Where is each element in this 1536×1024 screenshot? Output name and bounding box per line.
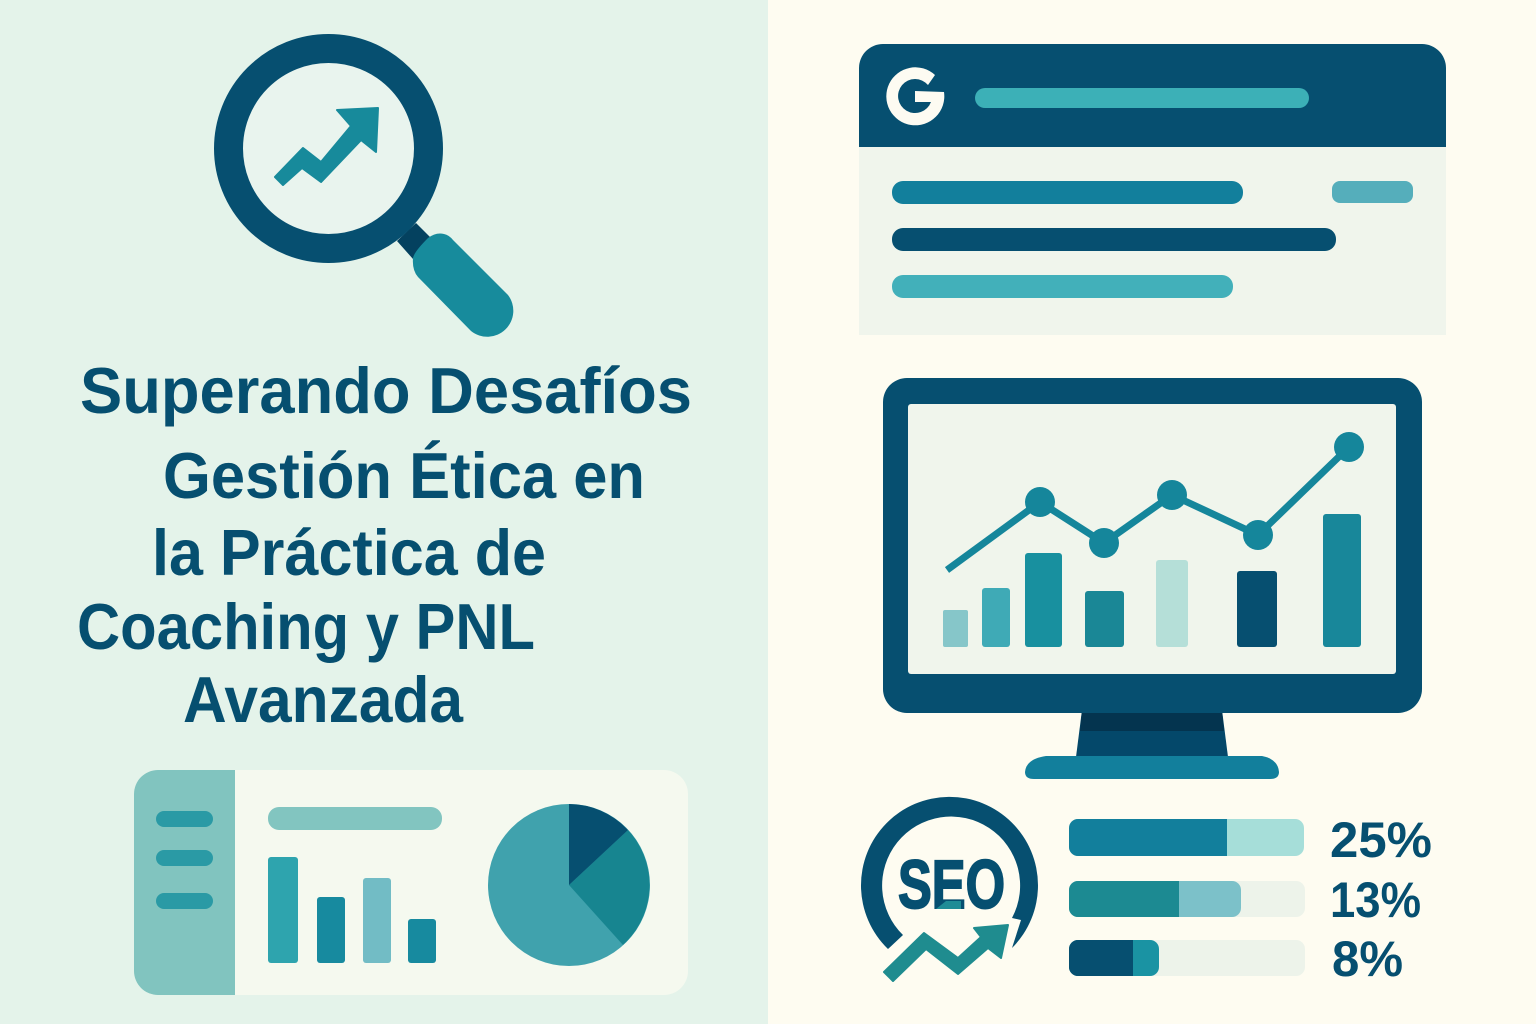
monitor screen xyxy=(908,404,1396,674)
monitor stand base xyxy=(1025,756,1279,779)
dashboard pie chart xyxy=(488,804,650,966)
card body xyxy=(859,140,1446,335)
monitor stand neck xyxy=(1076,710,1228,757)
title xyxy=(77,354,692,736)
result lines xyxy=(892,181,1413,298)
icon: Google G xyxy=(886,67,944,125)
label: 8%: 8% xyxy=(1332,931,1403,987)
panel: left background xyxy=(0,0,768,1024)
icon: magnifying glass with rising arrow xyxy=(228,48,513,337)
panel: search result card xyxy=(859,44,1446,335)
title: Superando Desafíos xyxy=(80,354,692,427)
rising arrow xyxy=(275,108,378,185)
bar: 8% xyxy=(1069,940,1305,976)
title: Coaching y PNL xyxy=(77,590,535,663)
magnifier handle xyxy=(413,234,513,337)
percent bars xyxy=(1069,812,1432,987)
search header xyxy=(859,44,1446,147)
SEO rising arrow xyxy=(884,925,1008,981)
SEO ring xyxy=(861,797,1038,949)
dashboard heading bar xyxy=(268,807,442,830)
title: la Práctica de xyxy=(152,516,546,589)
SEO letter accent xyxy=(936,901,961,909)
screen line chart xyxy=(947,432,1364,570)
sidebar menu items xyxy=(156,811,213,909)
label: 25%: 25% xyxy=(1330,812,1432,868)
title: Avanzada xyxy=(183,663,464,736)
SEO label: SEO xyxy=(898,846,1005,923)
dashboard sidebar xyxy=(134,770,235,995)
screen bar chart xyxy=(943,514,1361,647)
magnifier lens xyxy=(228,48,428,248)
label: 13%: 13% xyxy=(1330,872,1421,928)
monitor frame xyxy=(883,378,1422,713)
dashboard bar chart xyxy=(268,857,436,963)
search bar xyxy=(975,88,1309,108)
icon: computer monitor with chart xyxy=(883,378,1422,779)
title: Gestión Ética en xyxy=(163,439,645,512)
bar: 25% xyxy=(1069,819,1304,856)
monitor stand shadow band xyxy=(1080,710,1224,731)
magnifier handle neck xyxy=(397,223,432,259)
panel: right background xyxy=(768,0,1536,1024)
dashboard background xyxy=(134,770,688,995)
icon: SEO badge xyxy=(861,797,1038,981)
panel: dashboard card xyxy=(134,770,688,995)
bar: 13% xyxy=(1069,881,1305,917)
